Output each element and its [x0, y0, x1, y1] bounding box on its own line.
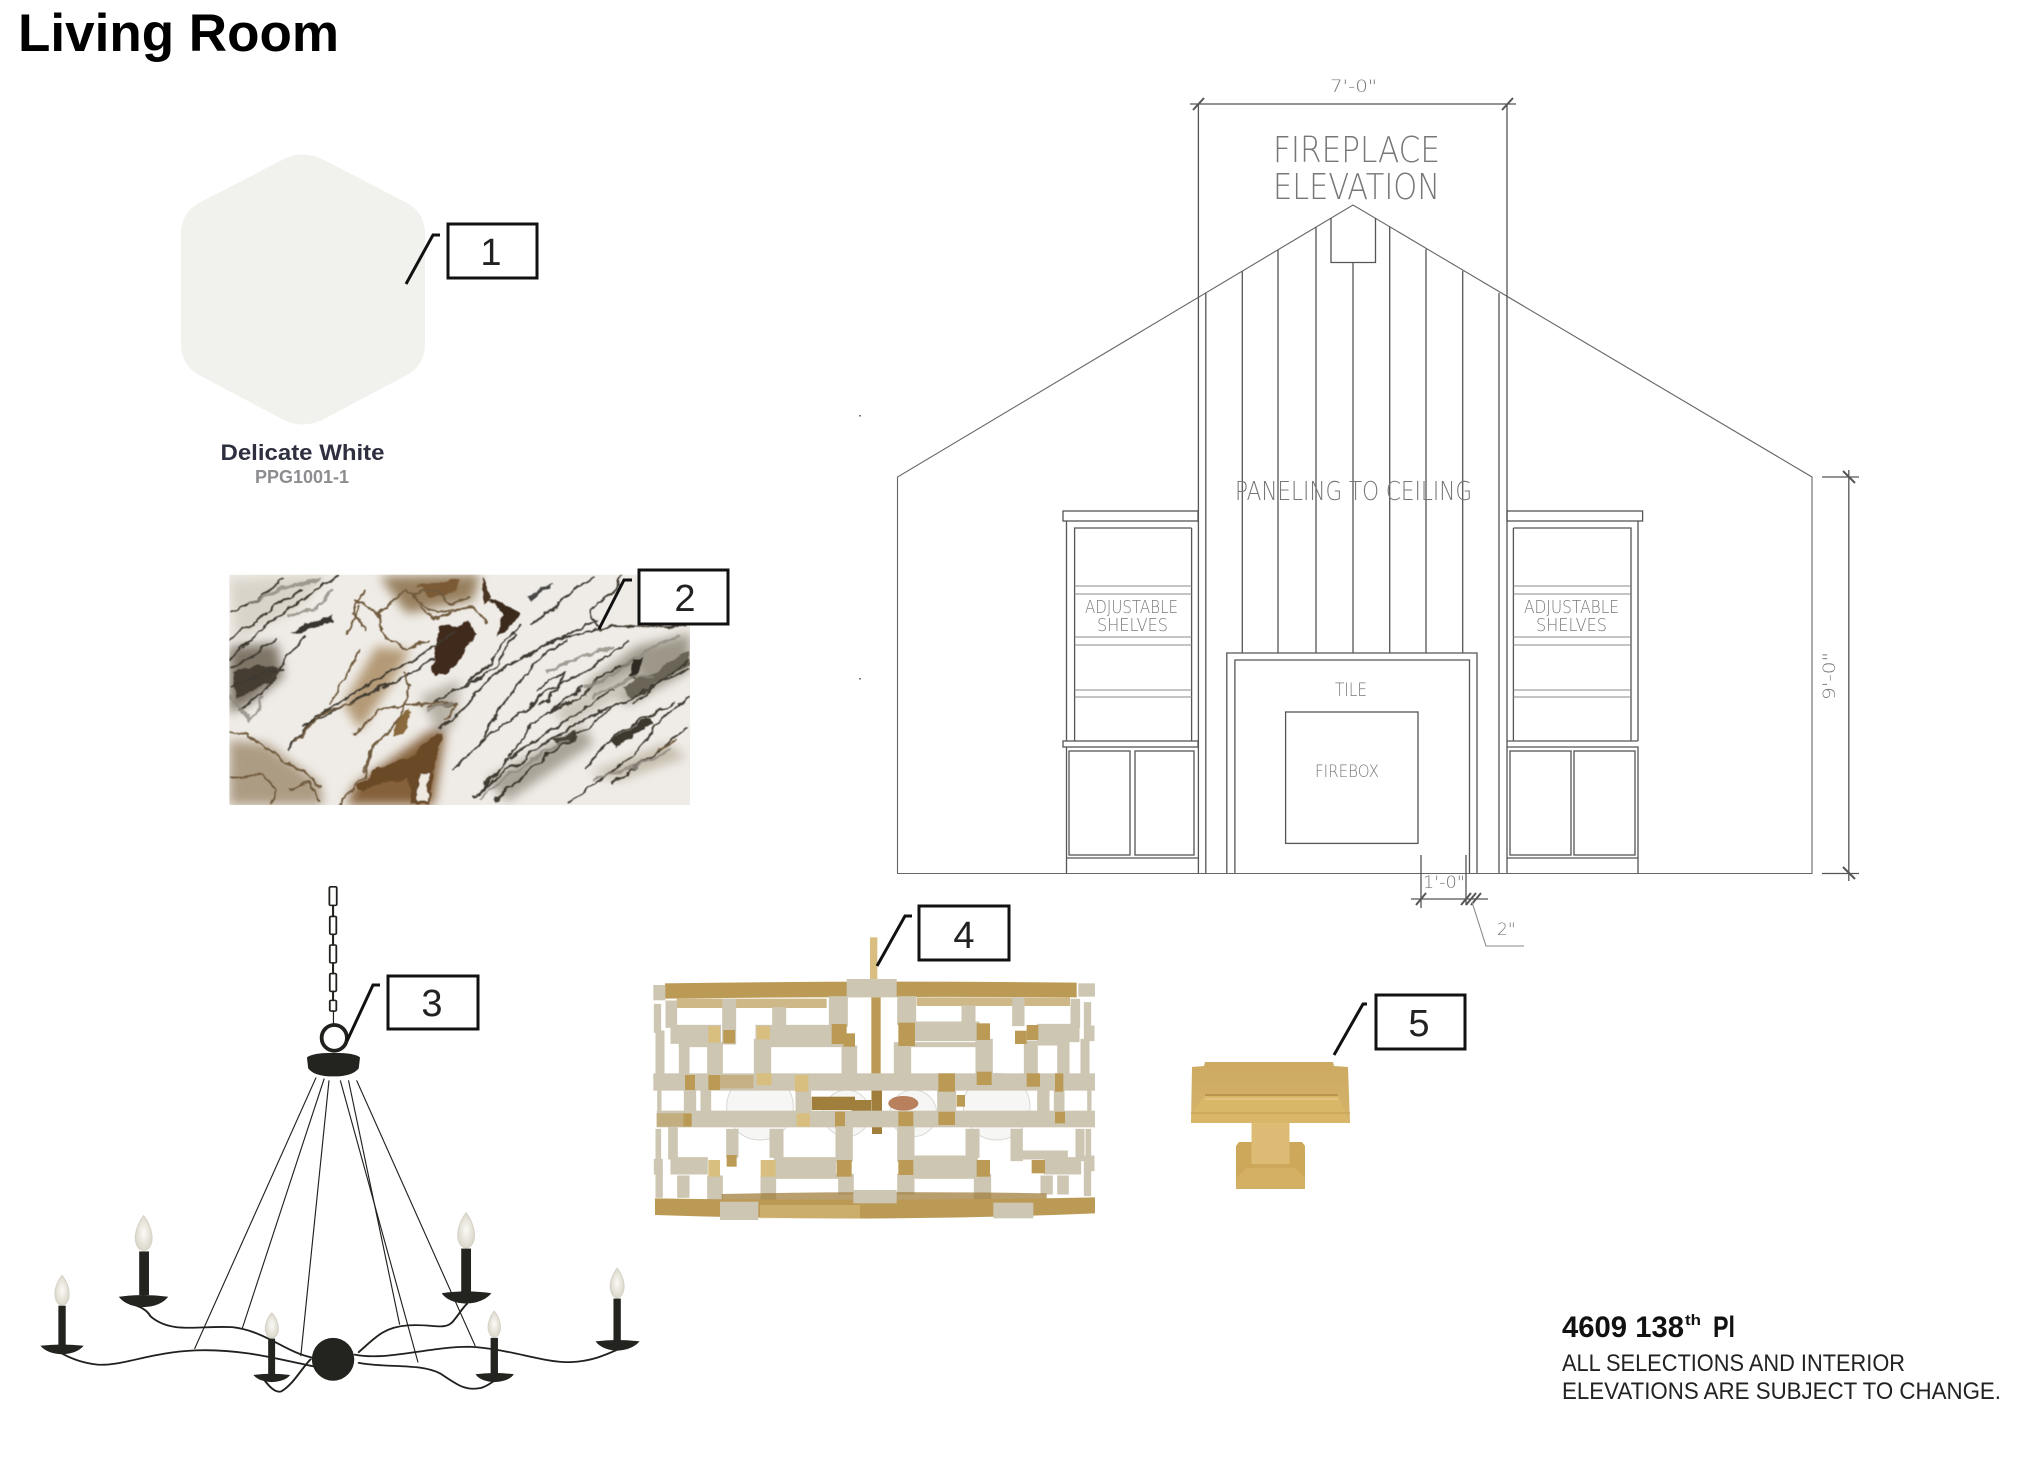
- upper lattice: [655, 997, 1093, 1073]
- address: th: [1685, 1312, 1701, 1329]
- left built-in cabinet: [1063, 511, 1198, 873]
- icon: paint hexagon: [181, 154, 425, 424]
- paint code: PPG1001-1: [255, 467, 349, 487]
- bottom dimensions: 2": [1497, 920, 1516, 940]
- callout 2: 2: [674, 578, 696, 620]
- right cluster: [623, 650, 690, 698]
- upper gold joints: [708, 1023, 1038, 1047]
- callout 5: 5: [1408, 1003, 1430, 1045]
- wavy arms: [61, 1304, 616, 1392]
- disclaimer: [1562, 1350, 2001, 1405]
- callout 3: 3: [421, 983, 443, 1025]
- left built-in cabinet: SHELVES: [1097, 615, 1168, 636]
- callout 5: [1334, 995, 1465, 1055]
- 9 foot dimension: 9'-0": [1820, 652, 1840, 700]
- middle vertical links: [658, 1090, 1090, 1111]
- heading: fireplace elevation: [1273, 130, 1440, 208]
- right built-in cabinet: SHELVES: [1536, 615, 1607, 636]
- middle gold joints: [657, 1072, 1065, 1128]
- callout 4: 4: [953, 915, 975, 957]
- disclaimer: ALL SELECTIONS AND INTERIOR: [1562, 1350, 1905, 1377]
- panel: black iron chandelier: [40, 887, 640, 1392]
- middle bands: [653, 1073, 1095, 1091]
- callout 1: 1: [480, 232, 502, 274]
- callout 2: [599, 570, 728, 629]
- socket arm: [812, 1097, 855, 1110]
- lower lattice: [655, 1127, 1093, 1202]
- panel: fireplace elevation drawing: [859, 77, 1859, 946]
- 7 foot dimension: [1190, 77, 1516, 873]
- panel: brass cabinet knob: [1191, 1062, 1350, 1189]
- hearth surround: FIREBOX: [1315, 762, 1379, 782]
- address: Pl: [1713, 1311, 1735, 1344]
- canopy: [307, 1053, 360, 1076]
- house outline: [898, 205, 1812, 874]
- heading: fireplace elevation: FIREPLACE: [1273, 130, 1440, 171]
- address block: [1562, 1311, 2001, 1405]
- bottom dimensions: [1411, 855, 1524, 946]
- veins: [230, 577, 690, 803]
- dark left cluster: [233, 665, 278, 698]
- firebox: [1286, 712, 1418, 843]
- stem: [870, 937, 877, 980]
- title: Living Room: [18, 4, 339, 63]
- panel: brass and linen drum pendant: [653, 937, 1095, 1220]
- panel: paint swatch: [181, 154, 425, 487]
- hearth surround: [1227, 653, 1477, 873]
- 9 foot dimension: [1820, 470, 1859, 881]
- ring: [322, 1025, 347, 1051]
- centre ball: [312, 1338, 354, 1381]
- address: 4609 138: [1562, 1311, 1684, 1344]
- bottom dimensions: 1'-0": [1423, 873, 1465, 893]
- tile label: TILE: [1335, 679, 1367, 701]
- top ring: [665, 982, 1077, 999]
- paint name: Delicate White: [220, 440, 384, 465]
- support rods: [195, 1078, 475, 1362]
- dark brown blobs: [433, 623, 477, 675]
- lower brown mass: [357, 733, 442, 803]
- heading: fireplace elevation: ELEVATION: [1273, 167, 1440, 208]
- candles: [40, 1213, 640, 1382]
- callout 3: [347, 976, 478, 1041]
- vertical paneling: [1206, 218, 1499, 873]
- bottom ring: [722, 1192, 1047, 1204]
- right built-in cabinet: [1507, 511, 1643, 873]
- panel: marble sample: [229, 575, 690, 805]
- knob base: [1236, 1142, 1305, 1189]
- knob stem: [1252, 1122, 1290, 1164]
- glass bulbs: [727, 1073, 1030, 1140]
- disclaimer: ELEVATIONS ARE SUBJECT TO CHANGE.: [1562, 1378, 2001, 1405]
- right built-in cabinet: ADJUSTABLE: [1524, 597, 1619, 618]
- callout 4: [877, 906, 1009, 966]
- paneling label: PANELING TO CEILING: [1235, 477, 1472, 507]
- callout 1: [406, 224, 537, 284]
- knob top plate: [1191, 1062, 1350, 1123]
- stray marks: [859, 415, 861, 680]
- left built-in cabinet: ADJUSTABLE: [1085, 597, 1178, 618]
- 7 foot dimension: 7'-0": [1330, 77, 1377, 97]
- lower gold joints: [708, 1155, 1045, 1177]
- chain: [329, 887, 337, 1025]
